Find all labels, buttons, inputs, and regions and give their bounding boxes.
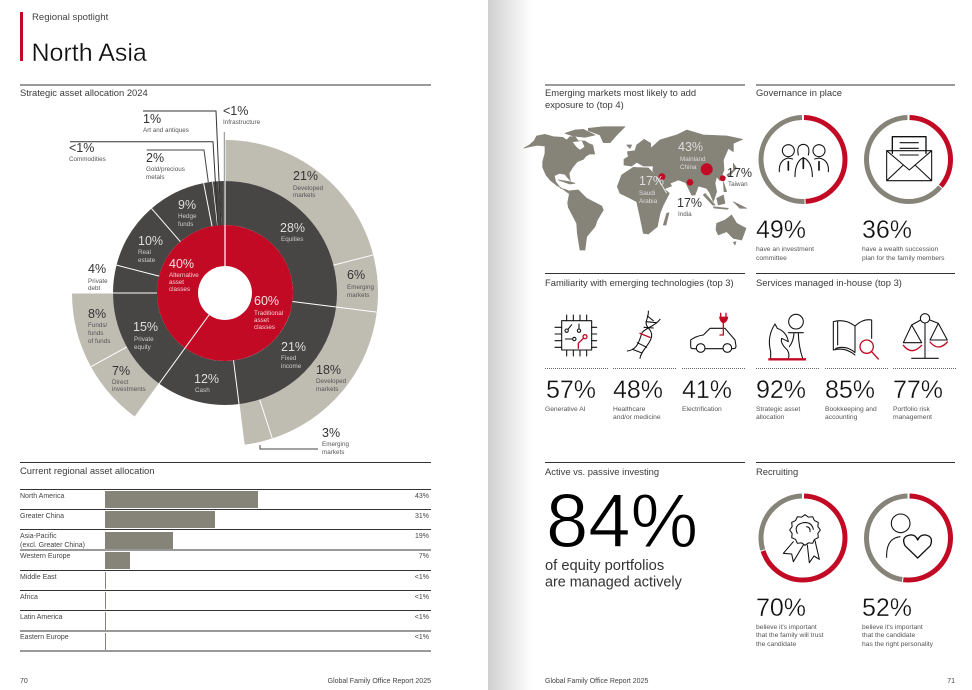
sunburst labels: 12% bbox=[194, 372, 219, 386]
sunburst labels: Art and antiques bbox=[143, 127, 189, 134]
sunburst labels: Gold/precious bbox=[146, 166, 185, 173]
stat: 52% bbox=[862, 594, 934, 648]
sunburst labels: Emerging bbox=[322, 441, 349, 448]
heading: governance: Governance in place bbox=[756, 87, 842, 98]
leader lines bbox=[70, 111, 318, 449]
icon: person with heart bbox=[887, 514, 931, 558]
sunburst labels: Private bbox=[134, 336, 154, 343]
bar chart: North America bbox=[20, 493, 64, 500]
icon: committee people bbox=[779, 144, 828, 177]
stat: 92%: 92% bbox=[756, 376, 806, 404]
caption: equity portfolios bbox=[545, 558, 683, 590]
heading: emerging markets: exposure to (top 4) bbox=[545, 99, 624, 110]
sunburst chart bbox=[72, 140, 377, 445]
sunburst labels: asset bbox=[169, 279, 184, 286]
sunburst labels bbox=[69, 104, 374, 456]
heading: recruiting: Recruiting bbox=[756, 466, 798, 477]
icon: chess pieces bbox=[768, 314, 806, 359]
sunburst labels: Direct bbox=[112, 379, 129, 386]
bar chart: Asia-Pacific bbox=[20, 533, 57, 540]
sunburst labels: funds bbox=[88, 330, 103, 337]
panel: familiarity with emerging technologies bbox=[545, 274, 745, 421]
sunburst labels: 9% bbox=[178, 198, 196, 212]
icon: book and magnifier bbox=[833, 320, 878, 359]
page header: Regional spotlight bbox=[32, 12, 109, 23]
stat: 70%: believe it's important bbox=[756, 624, 817, 631]
stat: 70%: that the family will trust bbox=[756, 632, 824, 639]
ring: right personality 52% bbox=[866, 496, 950, 580]
sunburst labels: Funds/ bbox=[88, 322, 108, 329]
stat: 48%: and/or medicine bbox=[613, 414, 661, 421]
map labels: 17% bbox=[677, 196, 702, 210]
stat: 48%: Healthcare bbox=[613, 406, 646, 413]
stat: 52%: believe it's important bbox=[862, 624, 923, 631]
sunburst labels: estate bbox=[138, 257, 156, 264]
icon: award rosette bbox=[783, 515, 820, 563]
bar chart: Western Europe bbox=[20, 553, 71, 560]
stat: 85%: accounting bbox=[825, 414, 858, 421]
ring: investment committee 49% bbox=[761, 118, 845, 202]
sunburst labels: debt bbox=[88, 285, 101, 292]
sunburst labels: Developed bbox=[293, 185, 324, 192]
stat: 36% bbox=[862, 216, 945, 262]
bar chart: (excl. Greater China) bbox=[20, 542, 85, 549]
footer: left page: 70 bbox=[20, 678, 28, 685]
ring: succession plan 36% bbox=[866, 118, 950, 202]
bar chart: 7% bbox=[419, 553, 429, 560]
map labels: 17% bbox=[727, 166, 752, 180]
sunburst labels: Cash bbox=[195, 387, 210, 394]
sunburst labels: 18% bbox=[316, 363, 341, 377]
bar chart: <1% bbox=[415, 594, 429, 601]
stat: 92% bbox=[756, 376, 806, 421]
stat: 77%: management bbox=[893, 414, 932, 421]
stat: 36%: 36% bbox=[862, 216, 912, 244]
caption: equity portfolios: of equity portfolios bbox=[545, 558, 664, 574]
panel: emerging markets bbox=[524, 85, 752, 250]
bar chart bbox=[20, 490, 431, 651]
sunburst labels: 21% bbox=[281, 340, 306, 354]
heading: strategic asset allocation: Strategic asset allocation 2024 bbox=[20, 87, 148, 98]
stat: 49%: committee bbox=[756, 255, 787, 262]
icon: AI chip bbox=[555, 315, 597, 356]
inner ring: traditional vs alternative bbox=[177, 245, 272, 341]
bar chart: <1% bbox=[415, 634, 429, 641]
sunburst labels: income bbox=[281, 363, 302, 370]
sunburst labels: 40% bbox=[169, 257, 194, 271]
sunburst labels: markets bbox=[347, 292, 369, 299]
panel: active vs passive investing bbox=[545, 462, 745, 590]
stat: 85% bbox=[825, 376, 877, 421]
sunburst labels: markets bbox=[322, 449, 344, 456]
sunburst labels: Traditional bbox=[254, 310, 283, 317]
sunburst labels: 21% bbox=[293, 169, 318, 183]
sunburst labels: 1% bbox=[143, 112, 161, 126]
sunburst labels: funds bbox=[178, 221, 193, 228]
panel: services managed in-house bbox=[756, 274, 956, 421]
stat: 85%: Bookkeeping and bbox=[825, 406, 877, 413]
stat: 52%: has the right personality bbox=[862, 641, 934, 648]
heading: familiarity: Familiarity with emerging technologies (top 3) bbox=[545, 277, 734, 288]
icon: envelope bbox=[887, 137, 932, 181]
heading: active vs passive: Active vs. passive investing bbox=[545, 466, 659, 477]
sunburst labels: classes bbox=[169, 286, 190, 293]
panel: strategic asset allocation bbox=[20, 85, 431, 456]
bar chart: Greater China bbox=[20, 513, 64, 520]
big stat: 84%: 84% bbox=[546, 479, 698, 564]
stat: 77% bbox=[893, 376, 943, 421]
bar chart: Middle East bbox=[20, 574, 57, 581]
sunburst labels: investments bbox=[112, 386, 146, 393]
sunburst labels: 10% bbox=[138, 234, 163, 248]
sunburst labels: Private bbox=[88, 278, 108, 285]
sunburst labels: markets bbox=[316, 386, 338, 393]
stat: 77%: 77% bbox=[893, 376, 943, 404]
stat: 49% bbox=[756, 216, 814, 262]
stat: 48% bbox=[613, 376, 663, 421]
stat: 52%: 52% bbox=[862, 594, 912, 622]
sunburst labels: 6% bbox=[347, 268, 365, 282]
sunburst labels: 3% bbox=[322, 426, 340, 440]
sunburst labels: <1% bbox=[69, 141, 94, 155]
stat: 85%: 85% bbox=[825, 376, 875, 404]
map labels: Saudi bbox=[639, 190, 655, 197]
sunburst labels: asset bbox=[254, 317, 269, 324]
sunburst labels: metals bbox=[146, 174, 165, 181]
ring: family will trust 70% bbox=[761, 496, 845, 580]
map labels: Arabia bbox=[639, 198, 658, 205]
bar chart: Eastern Europe bbox=[20, 634, 69, 641]
footer: right page: Global Family Office Report 2025 bbox=[545, 678, 648, 685]
icon: electric car bbox=[691, 313, 736, 352]
sunburst labels: 4% bbox=[88, 262, 106, 276]
footer: left page bbox=[20, 678, 431, 685]
heading: emerging markets: Emerging markets most likely to add bbox=[545, 87, 696, 98]
stat: 70% bbox=[756, 594, 824, 648]
map labels: Mainland bbox=[680, 156, 706, 163]
map labels bbox=[639, 140, 752, 218]
sunburst labels: Developed bbox=[316, 378, 347, 385]
stat: 41%: Electrification bbox=[682, 406, 722, 413]
page header bbox=[20, 12, 147, 67]
heading: current regional asset allocation: Current regional asset allocation bbox=[20, 465, 154, 476]
bar chart: 43% bbox=[415, 493, 429, 500]
sunburst labels: 15% bbox=[133, 320, 158, 334]
panel: governance in place bbox=[756, 85, 955, 262]
stat: 70%: 70% bbox=[756, 594, 806, 622]
stat: 41%: 41% bbox=[682, 376, 732, 404]
footer: left page: Global Family Office Report 2025 bbox=[328, 678, 431, 685]
stat: 36%: have a wealth succession bbox=[862, 246, 938, 253]
footer: right page bbox=[545, 678, 955, 685]
bar chart: 31% bbox=[415, 513, 429, 520]
icon: DNA bbox=[627, 311, 660, 358]
map labels: China bbox=[680, 164, 697, 171]
sunburst labels: 7% bbox=[112, 364, 130, 378]
stat: 92%: allocation bbox=[756, 414, 785, 421]
bar chart: <1% bbox=[415, 614, 429, 621]
sunburst labels: Alternative bbox=[169, 272, 199, 279]
map labels: 17% bbox=[639, 174, 664, 188]
stat: 36%: plan for the family members bbox=[862, 255, 945, 262]
bar chart: <1% bbox=[415, 574, 429, 581]
stat: 92%: Strategic asset bbox=[756, 406, 800, 413]
heading: emerging markets bbox=[545, 87, 696, 110]
sunburst labels: 8% bbox=[88, 307, 106, 321]
sunburst labels: Commodities bbox=[69, 156, 106, 163]
stat: 57%: Generative AI bbox=[545, 406, 586, 413]
stat: 77%: Portfolio risk bbox=[893, 406, 930, 413]
footer: right page: 71 bbox=[947, 678, 955, 685]
stat: 57%: 57% bbox=[546, 376, 596, 404]
bar chart: 19% bbox=[415, 533, 429, 540]
middle ring: asset classes bbox=[135, 203, 315, 383]
sunburst labels: of funds bbox=[88, 338, 110, 345]
sunburst labels: Infrastructure bbox=[223, 119, 261, 126]
outer ring: sub-allocations bbox=[92, 160, 357, 424]
sunburst labels: Equities bbox=[281, 236, 303, 243]
sunburst labels: classes bbox=[254, 324, 275, 331]
sunburst labels: 28% bbox=[280, 221, 305, 235]
sunburst labels: 60% bbox=[254, 294, 279, 308]
stat: 49%: have an investment bbox=[756, 246, 814, 253]
sunburst labels: Real bbox=[138, 249, 151, 256]
map labels: Taiwan bbox=[728, 181, 748, 188]
map markers bbox=[659, 163, 726, 186]
panel: recruiting bbox=[756, 462, 955, 648]
sunburst labels: markets bbox=[293, 192, 315, 199]
sunburst labels: Fixed bbox=[281, 355, 297, 362]
stat: 52%: that the candidate bbox=[862, 632, 915, 639]
sunburst labels: 2% bbox=[146, 151, 164, 165]
sunburst labels: equity bbox=[134, 344, 152, 351]
page header: North Asia bbox=[32, 39, 147, 67]
stat: 48%: 48% bbox=[613, 376, 663, 404]
map labels: 43% bbox=[678, 140, 703, 154]
bar chart: Latin America bbox=[20, 614, 63, 621]
heading: services: Services managed in-house (top 3) bbox=[756, 277, 902, 288]
panel: current regional asset allocation bbox=[20, 462, 431, 651]
sunburst labels: <1% bbox=[223, 104, 248, 118]
map labels: India bbox=[678, 211, 692, 218]
sunburst labels: Hedge bbox=[178, 213, 197, 220]
world map bbox=[524, 127, 747, 250]
caption: equity portfolios: are managed actively bbox=[545, 574, 683, 590]
icon: balance scale bbox=[903, 314, 947, 358]
bar chart: Africa bbox=[20, 594, 38, 601]
sunburst labels: Emerging bbox=[347, 284, 374, 291]
stat: 70%: the candidate bbox=[756, 641, 796, 648]
stat: 49%: 49% bbox=[756, 216, 806, 244]
